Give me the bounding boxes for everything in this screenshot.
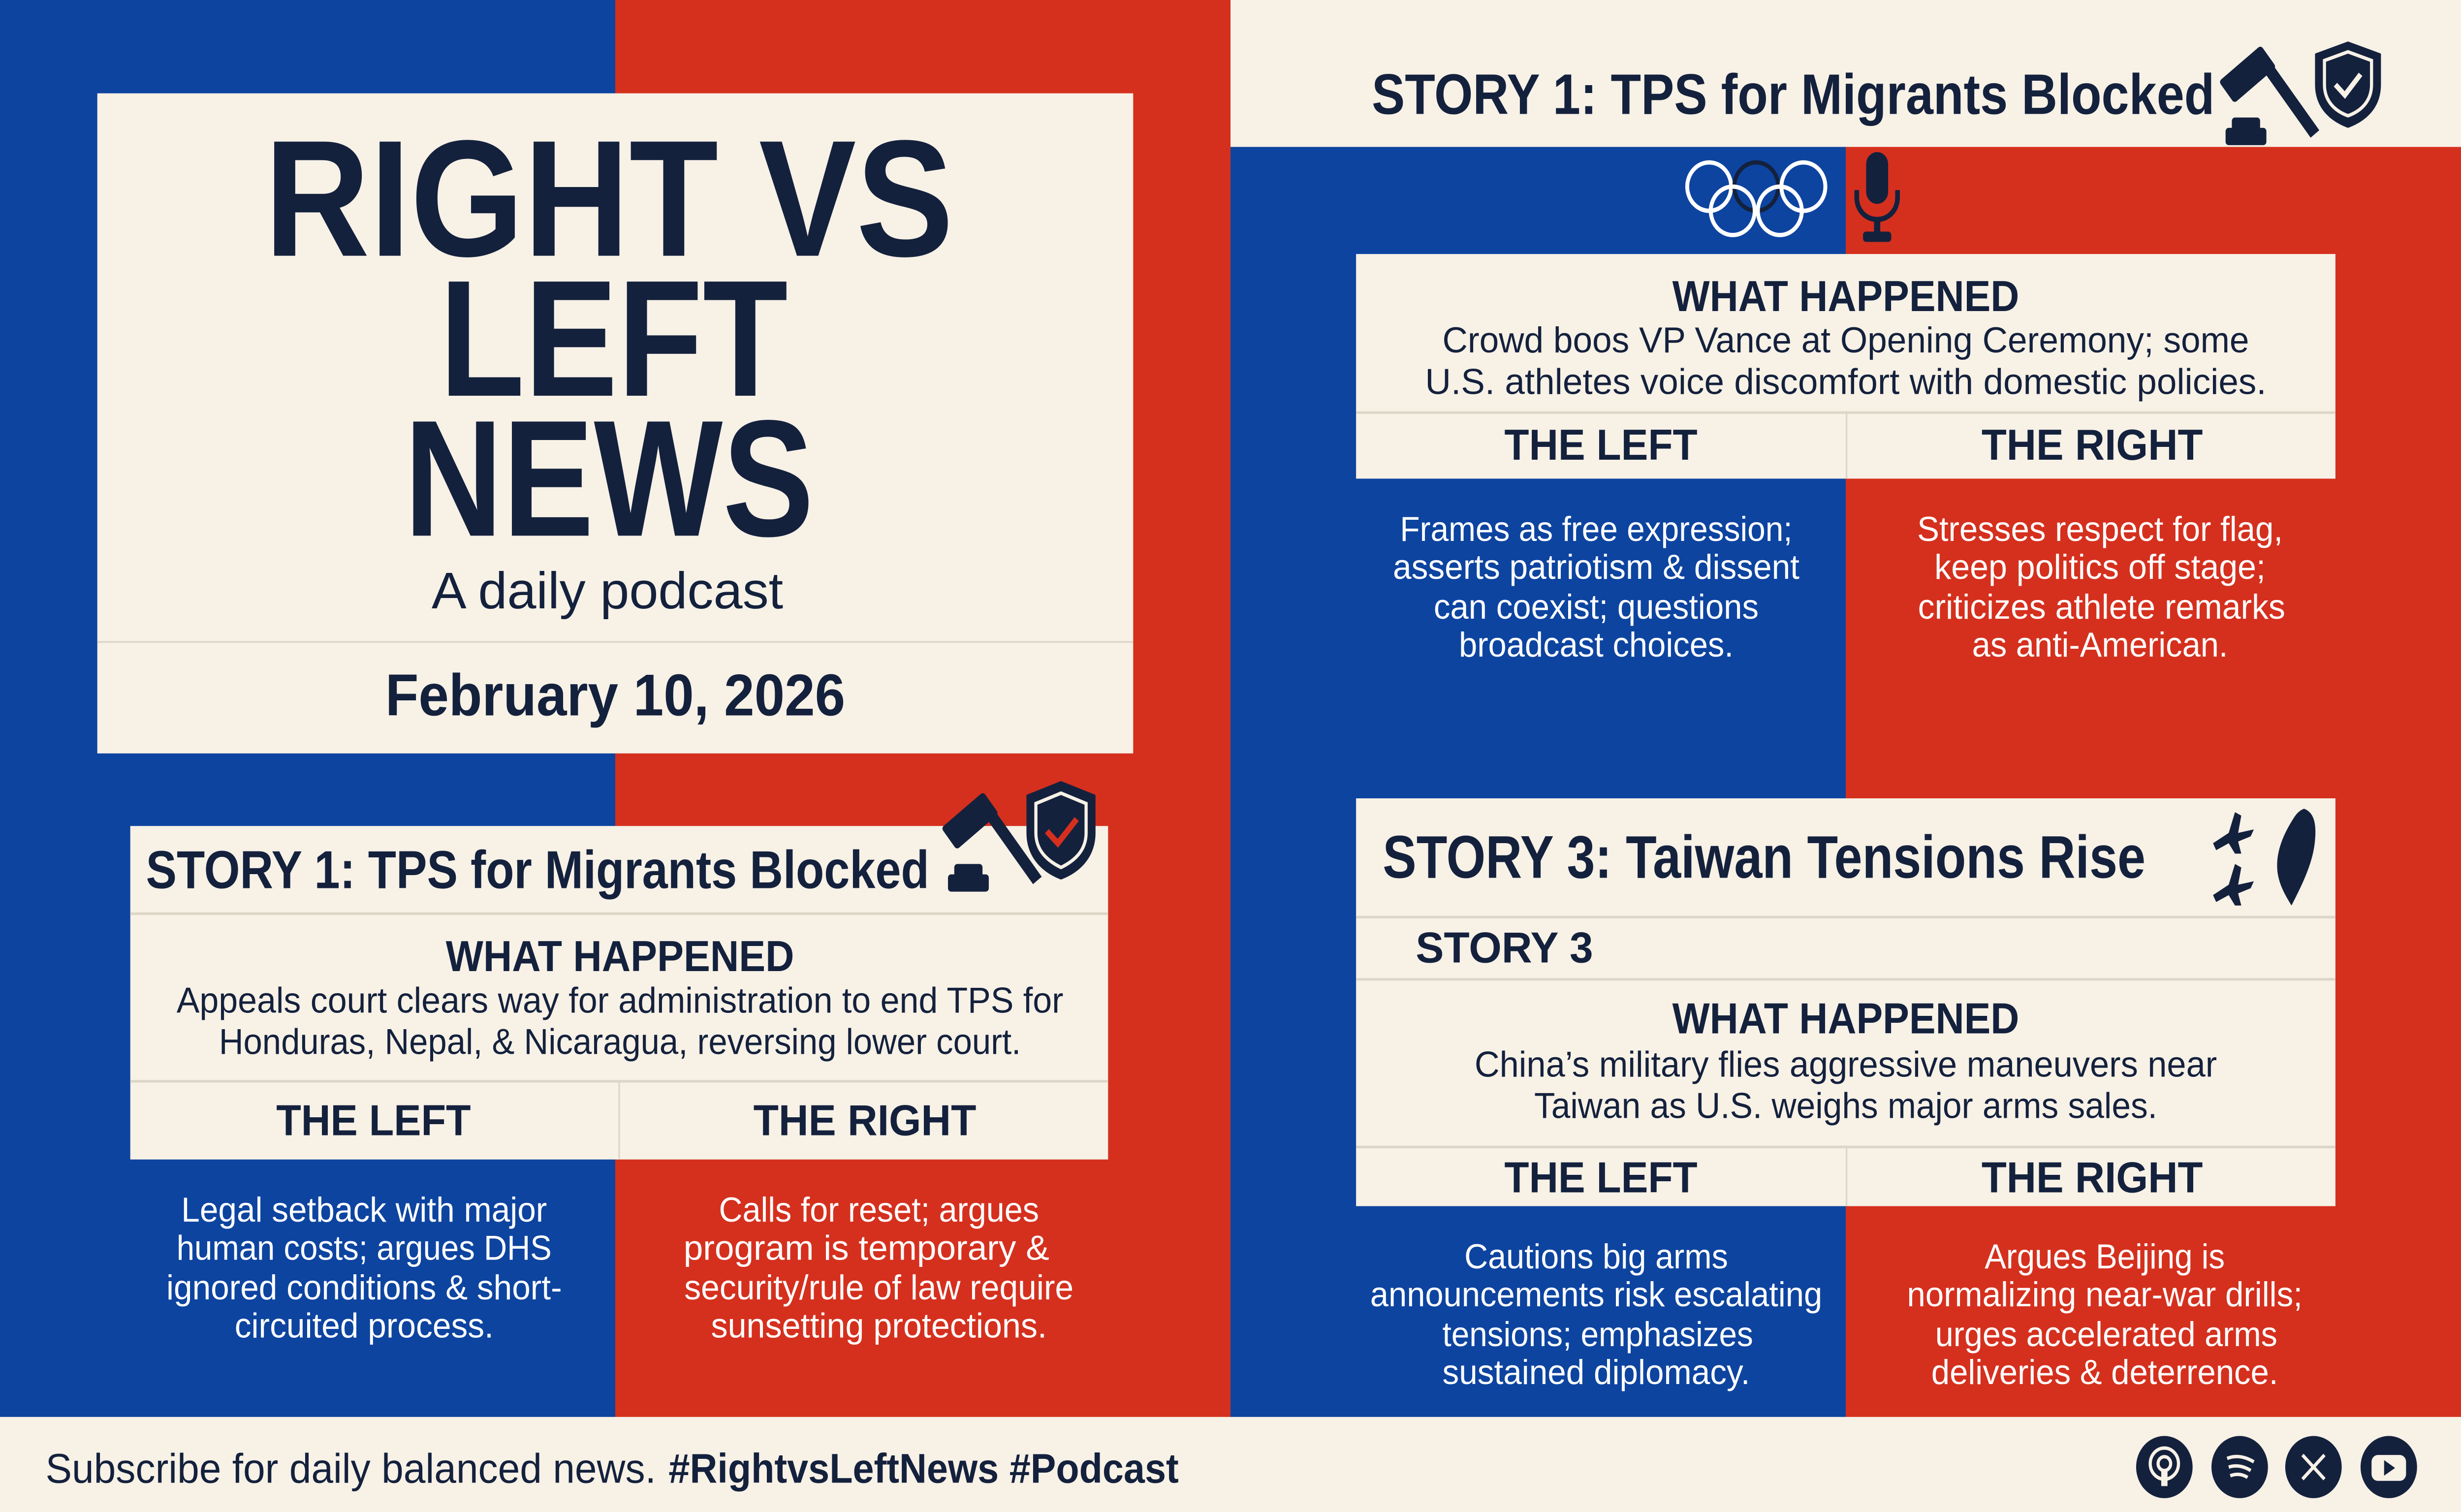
panel: story 3 — [1356, 798, 2335, 1392]
left/right headers: THE LEFT — [1504, 420, 1698, 469]
heading: right top: STORY 1: TPS for Migrants Blocked — [1372, 63, 2214, 126]
what happened: China’s military flies aggressive maneuvers near — [1475, 1043, 2217, 1084]
what happened: WHAT HAPPENED — [1672, 272, 2019, 320]
what happened: Crowd boos VP Vance at Opening Ceremony; some — [1442, 319, 2249, 360]
heading: STORY 1: TPS for Migrants Blocked — [146, 840, 929, 900]
text: left view: asserts patriotism & dissent — [1393, 548, 1799, 587]
date: February 10, 2026 — [385, 663, 845, 728]
text: left view: Cautions big arms — [1464, 1237, 1728, 1276]
text: left view: broadcast choices. — [1459, 626, 1734, 664]
title: NEWS — [404, 386, 814, 571]
text: right view — [1917, 510, 2285, 664]
panel: story 2 — [1356, 254, 2335, 664]
text: right view — [1907, 1237, 2303, 1392]
left/right headers: THE RIGHT — [1982, 1153, 2203, 1201]
text: right view: sunsetting protections. — [711, 1307, 1047, 1345]
left/right headers: THE RIGHT — [754, 1096, 976, 1144]
footer text: Subscribe for daily balanced news. — [45, 1446, 656, 1492]
text: left view: Frames as free expression; — [1400, 510, 1793, 549]
text: right view — [684, 1191, 1073, 1345]
what happened — [177, 932, 1063, 1062]
left/right headers — [1504, 1153, 2203, 1201]
text: right view: program is temporary & — [684, 1229, 1049, 1267]
text: left view: circuited process. — [235, 1307, 494, 1345]
what happened: U.S. athletes voice discomfort with domestic policies. — [1425, 361, 2267, 402]
text: right view: deliveries & deterrence. — [1931, 1353, 2278, 1392]
text: right view: security/rule of law require — [684, 1268, 1073, 1307]
heading: STORY 3: Taiwan Tensions Rise — [1383, 823, 2145, 891]
text: left view: human costs; argues DHS — [177, 1229, 552, 1267]
subtitle: A daily podcast — [432, 562, 783, 620]
text: right view: normalizing near-war drills; — [1907, 1275, 2303, 1314]
what happened: Appeals court clears way for administration to end TPS for — [177, 979, 1063, 1020]
what happened: Honduras, Nepal, & Nicaragua, reversing lower court. — [219, 1021, 1021, 1062]
text: right view: Stresses respect for flag, — [1917, 510, 2283, 549]
icon: jets and taiwan — [2213, 809, 2315, 906]
text: right view: criticizes athlete remarks — [1918, 588, 2285, 627]
what happened: Taiwan as U.S. weighs major arms sales. — [1534, 1085, 2157, 1126]
text: left view — [1370, 1237, 1822, 1392]
icon: gavel and shield — [2219, 41, 2381, 145]
left/right headers: THE RIGHT — [1982, 420, 2203, 469]
text: left view: can coexist; questions — [1434, 588, 1759, 627]
panel: story 1 left — [130, 781, 1108, 1345]
heading: right top — [1372, 41, 2381, 145]
footer: #RightvsLeftNews #Podcast — [668, 1446, 1179, 1492]
text: right view: as anti-American. — [1972, 626, 2228, 664]
icons: social — [2136, 1436, 2417, 1498]
text: right view: Argues Beijing is — [1985, 1237, 2225, 1276]
footer — [0, 1417, 2461, 1512]
what happened: WHAT HAPPENED — [446, 932, 794, 980]
text: right view: keep politics off stage; — [1934, 548, 2266, 587]
text: right view: urges accelerated arms — [1935, 1315, 2277, 1354]
title card — [97, 94, 1133, 754]
icon: olympic rings — [1687, 162, 1826, 235]
left/right headers: THE LEFT — [1504, 1153, 1698, 1201]
title: LEFT — [440, 246, 788, 431]
left/right headers: THE LEFT — [276, 1096, 471, 1144]
what happened — [1475, 994, 2217, 1126]
left/right headers — [276, 1096, 976, 1144]
what happened: WHAT HAPPENED — [1672, 994, 2019, 1042]
icon: gavel and shield — [941, 781, 1096, 892]
text: left view: Legal setback with major — [181, 1191, 547, 1229]
subheading: STORY 3 — [1416, 923, 1593, 972]
text: left view — [166, 1191, 562, 1345]
text: left view: ignored conditions & short- — [166, 1268, 562, 1307]
text: left view: announcements risk escalating — [1370, 1275, 1822, 1314]
title — [264, 106, 953, 571]
what happened — [1425, 272, 2267, 402]
title: RIGHT VS — [264, 106, 953, 291]
left/right headers — [1504, 420, 2203, 469]
icon: microphone — [1857, 152, 1897, 242]
text: right view: Calls for reset; argues — [719, 1191, 1039, 1229]
text: left view: sustained diplomacy. — [1442, 1353, 1750, 1392]
text: left view — [1393, 510, 1799, 664]
text: left view: tensions; emphasizes — [1442, 1315, 1753, 1354]
